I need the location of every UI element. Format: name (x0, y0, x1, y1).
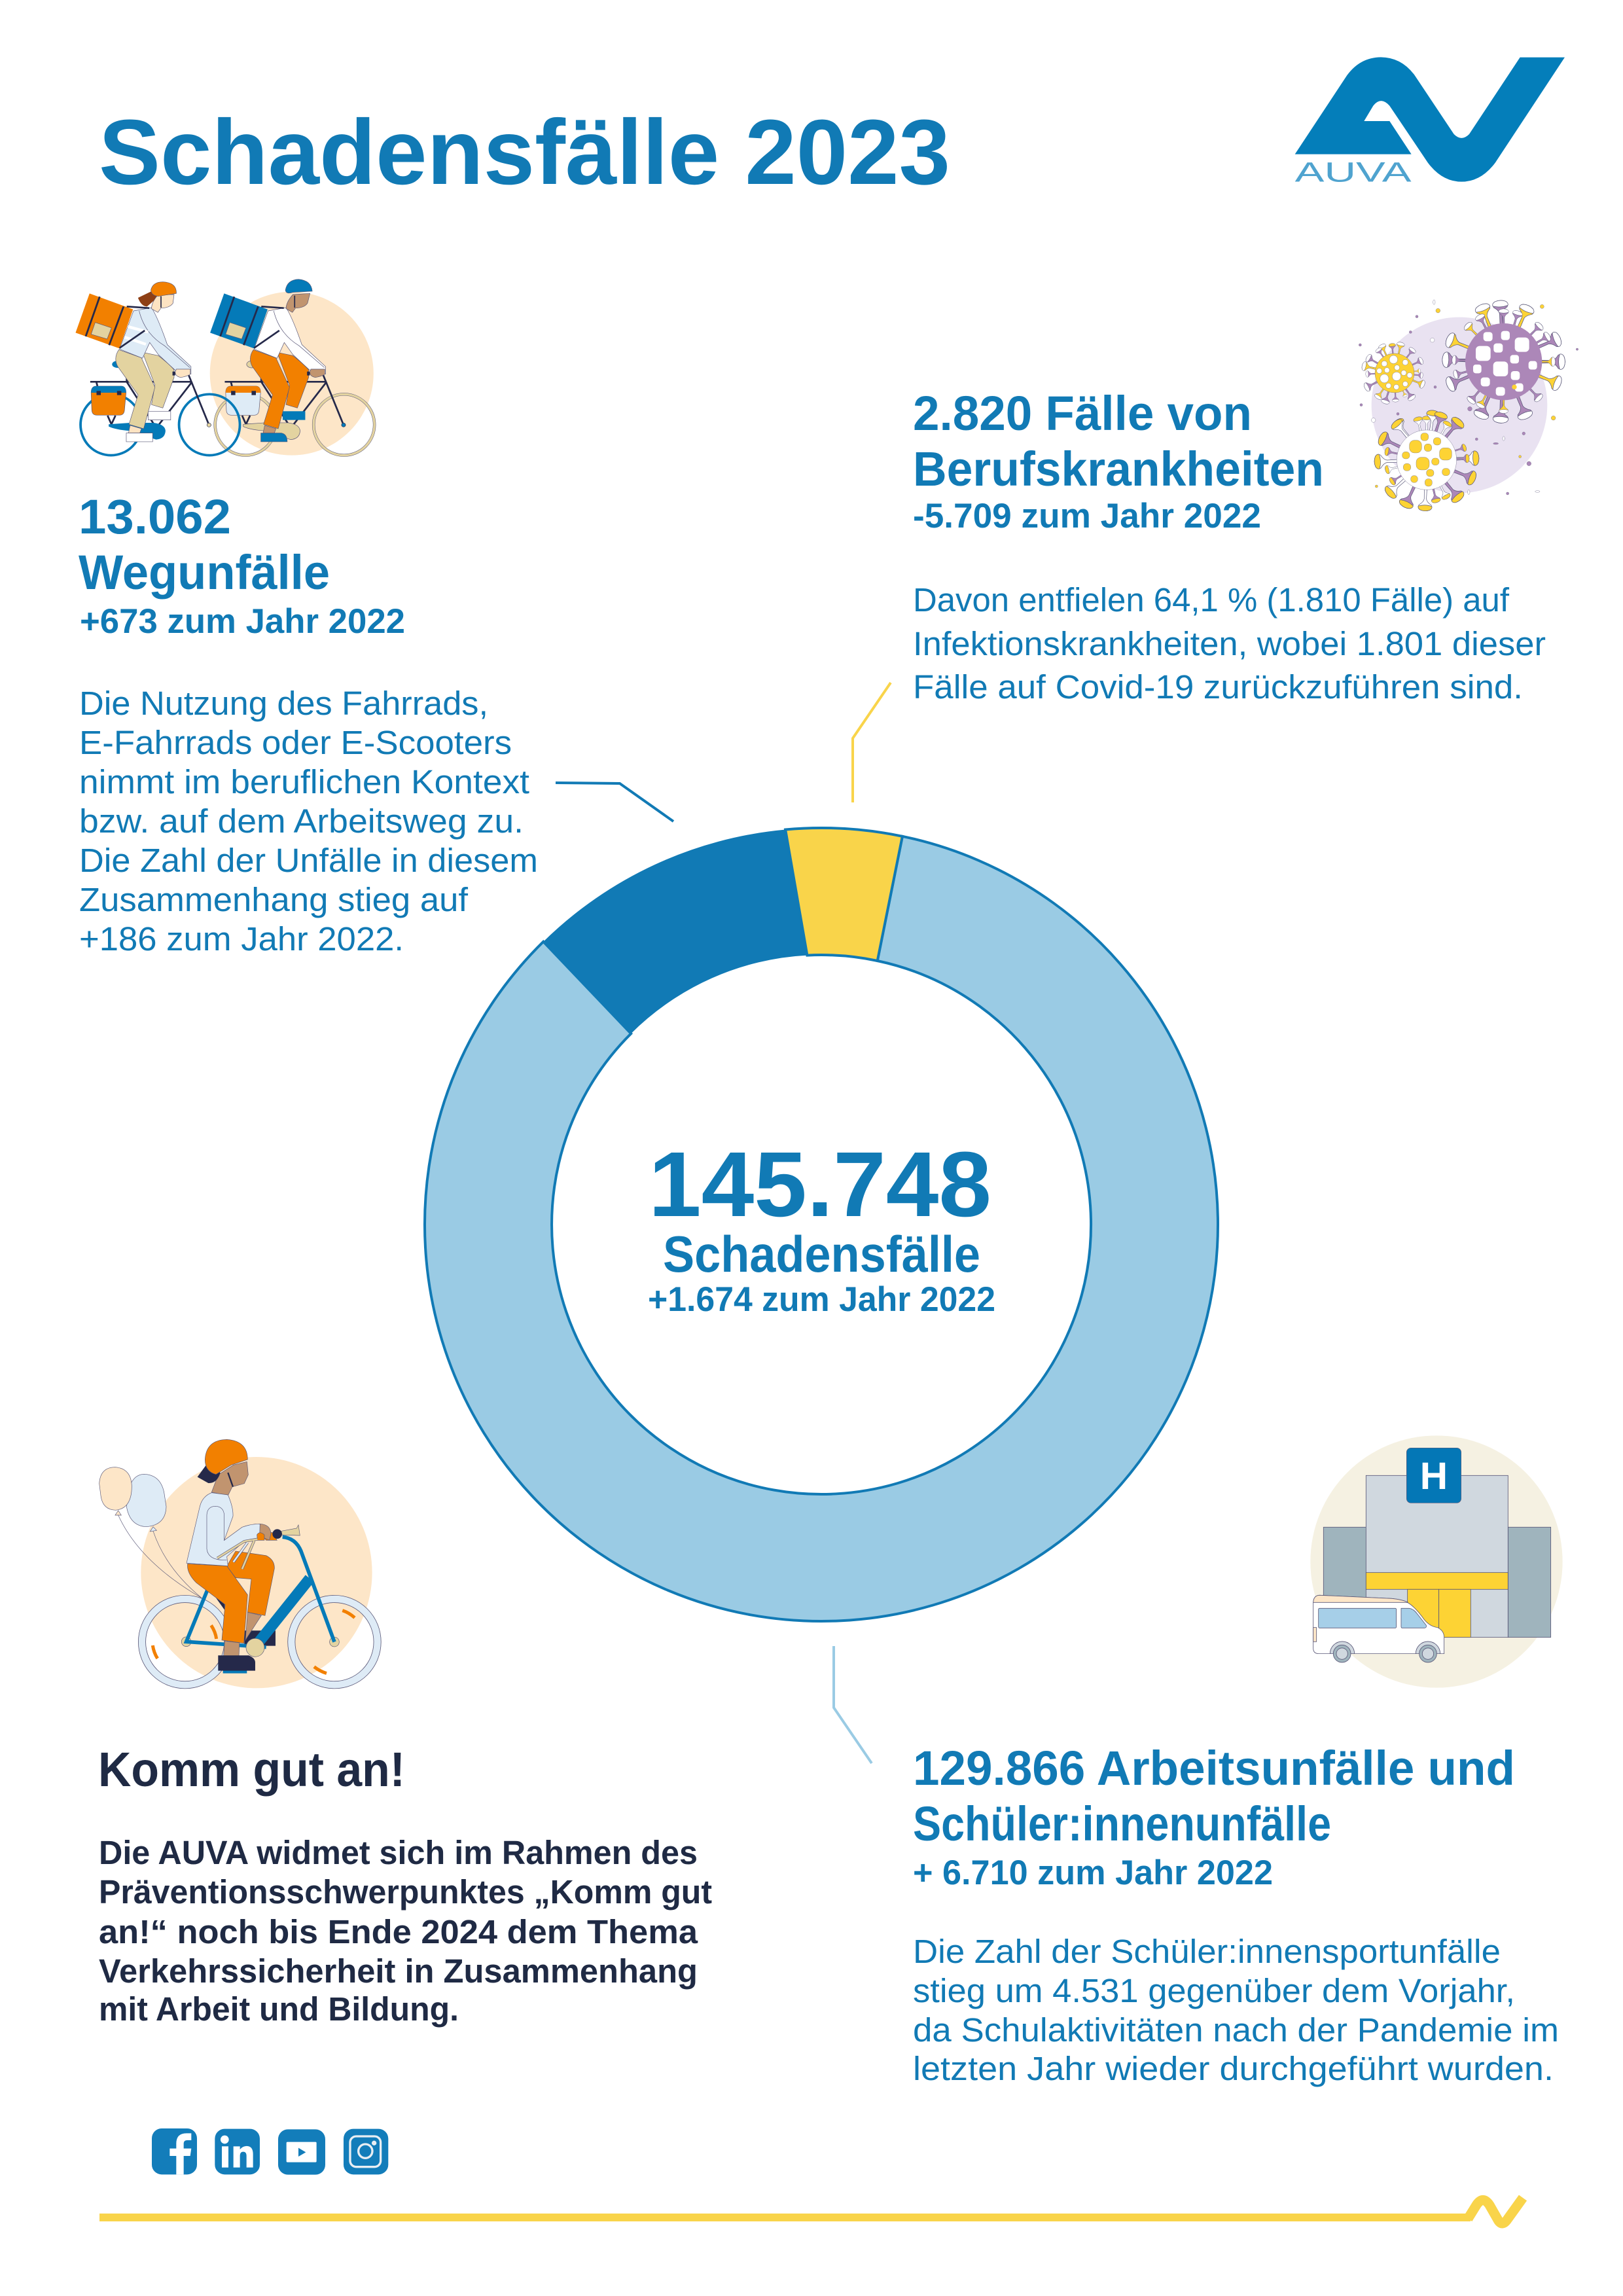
description: E-Fahrrads oder E-Scooters (79, 724, 512, 761)
text block: Berufskrankheiten (913, 386, 1546, 706)
description: bzw. auf dem Arbeitsweg zu. (79, 802, 524, 840)
leader line: Arbeitsunfälle to donut (834, 1646, 872, 1763)
cyclist: woman on left (75, 282, 240, 456)
icon: youtube (278, 2129, 325, 2175)
description: +186 zum Jahr 2022. (79, 920, 404, 958)
body: Verkehrssicherheit in Zusammenhang (99, 1952, 698, 1990)
text block: Wegunfälle (79, 490, 538, 958)
stat: 13.062 Wegunfälle: +673 zum Jahr 2022 (80, 602, 405, 641)
cyclist: man on right (210, 279, 374, 456)
illustration: two cyclists with delivery backpacks (75, 279, 374, 456)
description (79, 685, 538, 958)
stat: 2.820 Fälle: Berufskrankheiten (913, 442, 1324, 496)
body: mit Arbeit und Bildung. (99, 1990, 459, 2028)
text block: Arbeitsunfälle (913, 1741, 1559, 2087)
center label: Schadensfälle (663, 1225, 980, 1283)
background circle (141, 1457, 372, 1688)
stat: 129.866 (913, 1741, 1515, 1892)
bicycle frame (181, 1525, 339, 1657)
stat: 129.866: + 6.710 zum Jahr 2022 (913, 1854, 1273, 1892)
social icons (152, 2128, 388, 2175)
title: Schadensfälle 2023 (99, 100, 950, 204)
segment: Wegunfälle (543, 830, 807, 1033)
description: Zusammenhang stieg auf (79, 881, 469, 918)
description: Die Zahl der Unfälle in diesem (79, 842, 538, 879)
stat: 129.866: 129.866 Arbeitsunfälle und (913, 1741, 1515, 1795)
background circle (1372, 317, 1547, 493)
building (1323, 1475, 1551, 1638)
description (913, 581, 1546, 706)
description: Davon entfielen 64,1 % (1.810 Fälle) auf (913, 581, 1510, 619)
virus: white (1374, 410, 1479, 511)
stat: 2.820 Fälle (913, 386, 1324, 535)
icon: instagram (344, 2129, 388, 2174)
description: Die Zahl der Schüler:innensportunfälle (913, 1933, 1501, 1970)
footer line with logo wave (99, 2198, 1523, 2223)
leader line: Berufskrankheiten to donut (853, 683, 891, 802)
center label: +1.674 zum Jahr 2022 (648, 1280, 995, 1319)
icon: linkedin (215, 2129, 260, 2174)
stat: 2.820 Fälle: -5.709 zum Jahr 2022 (913, 497, 1261, 535)
description: nimmt im beruflichen Kontext (79, 763, 529, 800)
background circle (210, 292, 374, 456)
segment: Arbeitsunfälle (425, 836, 1218, 1621)
segment: Berufskrankheiten (785, 828, 902, 961)
floating particles (1359, 300, 1578, 495)
wheels (142, 1599, 378, 1685)
illustration: virus particles (1359, 300, 1578, 511)
description: stieg um 4.531 gegenüber dem Vorjahr, (913, 1972, 1515, 2009)
stat: 13.062 Wegunfälle (79, 490, 405, 641)
description: da Schulaktivitäten nach der Pandemie im (913, 2011, 1559, 2049)
body: an!“ noch bis Ende 2024 dem Thema (99, 1913, 698, 1950)
body (99, 1834, 712, 2028)
H sign: H (1420, 1455, 1448, 1498)
background circle (1310, 1435, 1563, 1688)
leader line: Wegunfälle to donut (556, 783, 673, 821)
heading: Komm gut an! (98, 1742, 405, 1797)
body: Präventionsschwerpunktes „Komm gut (99, 1873, 712, 1910)
center label (648, 1132, 995, 1319)
body: Die AUVA widmet sich im Rahmen des (99, 1834, 698, 1871)
donut chart (425, 828, 1218, 1621)
stat: 129.866: Schüler:innenunfälle (913, 1797, 1331, 1851)
text block: Komm gut an (98, 1742, 712, 2028)
description: letzten Jahr wieder durchgeführt wurden. (913, 2050, 1554, 2087)
balloons (99, 1467, 202, 1598)
virus: yellow (1361, 342, 1426, 405)
description (913, 1933, 1559, 2087)
van (1313, 1595, 1444, 1662)
rider (187, 1439, 274, 1674)
description: Infektionskrankheiten, wobei 1.801 dieser (913, 625, 1546, 662)
virus: purple (1442, 300, 1565, 423)
stat: 13.062 Wegunfälle: Wegunfälle (79, 545, 330, 600)
center label: 145.748 (649, 1132, 991, 1236)
stat: 2.820 Fälle: 2.820 Fälle von (913, 386, 1252, 440)
illustration: hospital and van (1310, 1435, 1563, 1688)
icon: facebook (152, 2128, 197, 2174)
logo: AUVA (1295, 57, 1565, 188)
description: Fälle auf Covid-19 zurückzuführen sind. (913, 668, 1523, 706)
logo: AUVA: AUVA (1295, 157, 1412, 188)
H sign (1406, 1448, 1461, 1503)
stat: 13.062 Wegunfälle: 13.062 (79, 490, 231, 544)
illustration: cyclist with balloons (99, 1439, 378, 1688)
description: Die Nutzung des Fahrrads, (79, 685, 488, 722)
